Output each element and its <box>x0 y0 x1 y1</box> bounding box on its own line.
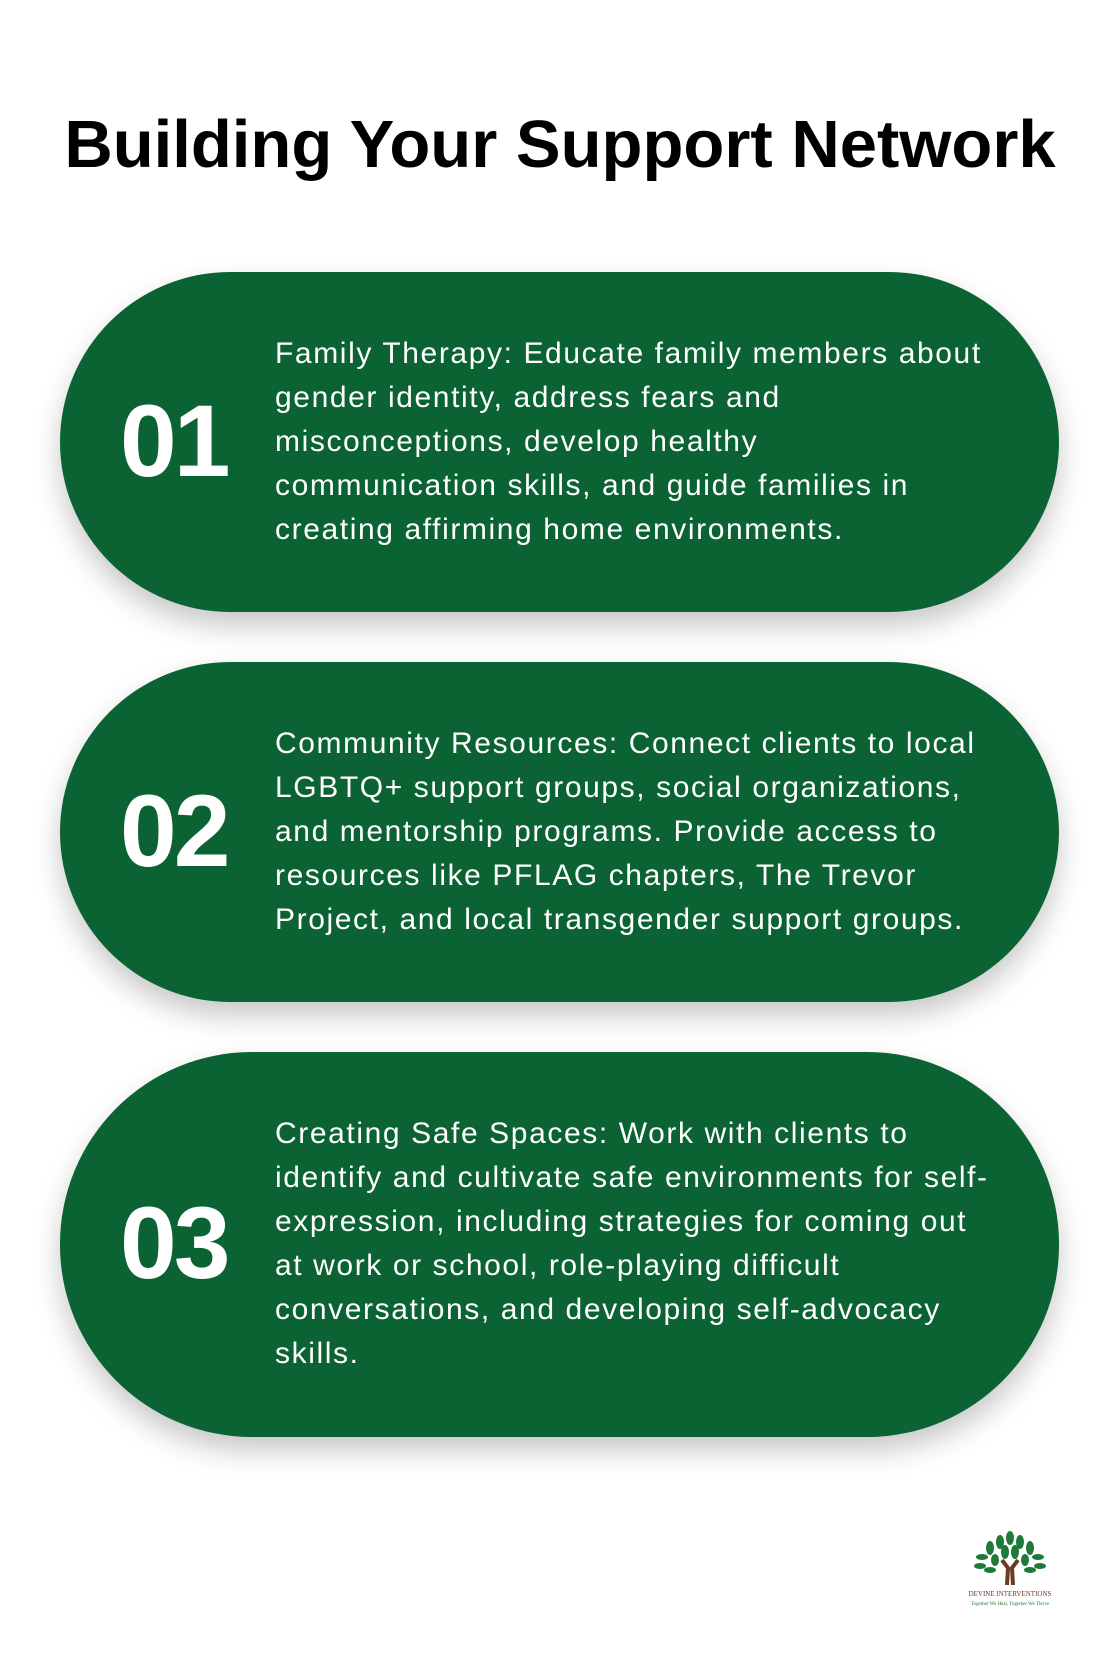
text: community resources: Project, and local transgender support groups. <box>275 903 964 936</box>
text: family therapy: misconceptions, develop healthy <box>275 425 758 458</box>
text: safe spaces: Creating Safe Spaces: Work with clients to <box>275 1117 909 1150</box>
panel: community resources <box>60 662 1059 1002</box>
text: family therapy: communication skills, and guide families in <box>275 469 909 502</box>
title: Building Your Support Network <box>64 107 1056 182</box>
text: safe spaces <box>275 1117 989 1370</box>
text: safe spaces: expression, including strategies for coming out <box>275 1205 967 1238</box>
panel: family therapy <box>60 272 1059 612</box>
text: family therapy: creating affirming home environments. <box>275 513 844 546</box>
text: community resources: and mentorship programs. Provide access to <box>275 815 937 848</box>
number 02: 02 <box>120 774 227 888</box>
number 03: 03 <box>120 1186 227 1300</box>
logo <box>968 1531 1051 1607</box>
logo text: DEVINE INTERVENTIONS <box>969 1590 1051 1598</box>
text: safe spaces: identify and cultivate safe environments for self- <box>275 1161 989 1194</box>
text: safe spaces: skills. <box>275 1337 360 1370</box>
text: community resources <box>275 727 976 936</box>
panel: safe spaces <box>60 1052 1059 1437</box>
logo text <box>968 1590 1051 1607</box>
text: community resources: resources like PFLAG chapters, The Trevor <box>275 859 917 892</box>
text: safe spaces: at work or school, role-playing difficult <box>275 1249 840 1282</box>
text: family therapy <box>275 337 982 546</box>
logo text: Together We Heal, Together We Thrive <box>971 1602 1049 1607</box>
text: community resources: LGBTQ+ support groups, social organizations, <box>275 771 962 804</box>
text: family therapy: gender identity, address fears and <box>275 381 781 414</box>
icon: tree <box>974 1531 1046 1585</box>
text: family therapy: Family Therapy: Educate family members about <box>275 337 982 370</box>
text: safe spaces: conversations, and developing self-advocacy <box>275 1293 941 1326</box>
text: community resources: Community Resources: Connect clients to local <box>275 727 976 760</box>
number 01: 01 <box>120 384 227 498</box>
